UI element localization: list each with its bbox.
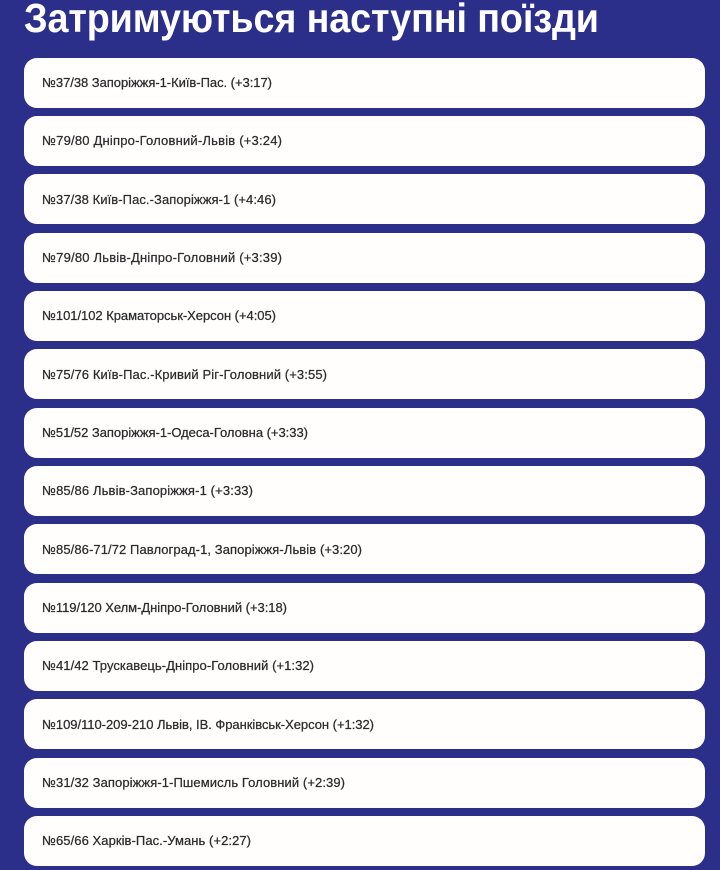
card: train 79/80 Dnipro-Lviv: №79/80 Дніпро-Головний-Львів (+3:24): [42, 133, 282, 148]
card: train 119/120 Chelm-Dnipro: [24, 583, 705, 633]
card: train 51/52 Zaporizhzhia-Odesa: [24, 408, 705, 458]
card: train 109/110-209-210 Lviv-Kherson: [24, 699, 705, 749]
card: train 79/80 Lviv-Dnipro: [24, 233, 705, 283]
card: train 31/32 Zaporizhzhia-Przemysl: №31/32 Запоріжжя-1-Пшемисль Головний (+2:39): [42, 775, 345, 790]
card: train 85/86 Lviv-Zaporizhzhia: №85/86 Львів-Запоріжжя-1 (+3:33): [42, 483, 253, 498]
card: train 119/120 Chelm-Dnipro: №119/120 Хелм-Дніпро-Головний (+3:18): [42, 600, 287, 615]
card: train 41/42 Truskavets-Dnipro: [24, 641, 705, 691]
card: train 31/32 Zaporizhzhia-Przemysl: [24, 758, 705, 808]
card: train 75/76 Kyiv-Kryvyi Rih: [24, 349, 705, 399]
card: train 79/80 Dnipro-Lviv: [24, 116, 705, 166]
card: train 101/102 Kramatorsk-Kherson: [24, 291, 705, 341]
card: train 37/38 Kyiv-Zaporizhzhia: [24, 174, 705, 224]
card: train 85/86-71/72 Pavlohrad: [24, 524, 705, 574]
card: train 65/66 Kharkiv-Uman: [24, 816, 705, 866]
card: train 85/86-71/72 Pavlohrad: №85/86-71/72 Павлоград-1, Запоріжжя-Львів (+3:20): [42, 542, 362, 557]
card: train 51/52 Zaporizhzhia-Odesa: №51/52 Запоріжжя-1-Одеса-Головна (+3:33): [42, 425, 308, 440]
card: train 37/38 Zaporizhzhia-Kyiv: [24, 58, 705, 108]
card: train 37/38 Kyiv-Zaporizhzhia: №37/38 Київ-Пас.-Запоріжжя-1 (+4:46): [42, 192, 276, 207]
card: train 79/80 Lviv-Dnipro: №79/80 Львів-Дніпро-Головний (+3:39): [42, 250, 282, 265]
card: train 75/76 Kyiv-Kryvyi Rih: №75/76 Київ-Пас.-Кривий Ріг-Головний (+3:55): [42, 367, 327, 382]
card: train 85/86 Lviv-Zaporizhzhia: [24, 466, 705, 516]
card: train 65/66 Kharkiv-Uman: №65/66 Харків-Пас.-Умань (+2:27): [42, 833, 251, 848]
card: train 41/42 Truskavets-Dnipro: №41/42 Трускавець-Дніпро-Головний (+1:32): [42, 658, 314, 673]
card: train 37/38 Zaporizhzhia-Kyiv: №37/38 Запоріжжя-1-Київ-Пас. (+3:17): [42, 75, 272, 90]
card: train 101/102 Kramatorsk-Kherson: №101/102 Краматорськ-Херсон (+4:05): [42, 308, 276, 323]
card: train 109/110-209-210 Lviv-Kherson: №109/110-209-210 Львів, ІВ. Франківськ-Херсон (+1:32): [42, 717, 374, 732]
